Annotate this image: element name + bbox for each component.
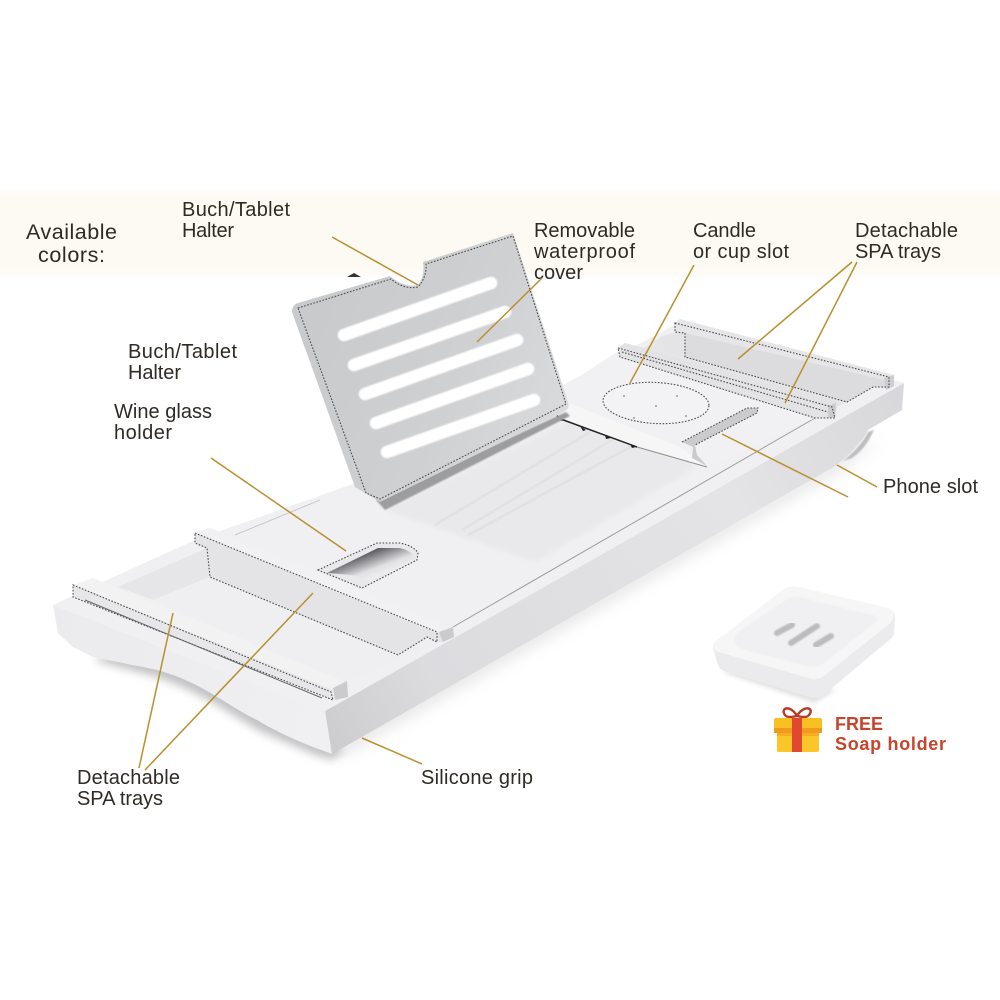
label: top spa trays: Detachable — [855, 220, 958, 242]
board stitching — [298, 236, 566, 499]
label: book holder top: Buch/Tablet — [182, 199, 290, 221]
label: removable cover: Removable — [534, 220, 635, 242]
soap dish top rim — [713, 586, 893, 679]
label: book holder top — [182, 199, 418, 285]
wine glass holder — [318, 543, 418, 588]
far spa tray — [618, 319, 894, 418]
label: removable cover: waterproof — [533, 241, 635, 263]
label: wine glass holder: Wine glass — [114, 401, 212, 423]
slatted centre mat — [385, 420, 700, 562]
label: bottom spa trays: SPA trays — [77, 788, 163, 810]
tray shadow under curved end — [93, 650, 345, 760]
label: phone slot: Phone slot — [883, 476, 978, 498]
icon: gift box — [774, 708, 822, 752]
label: candle slot: Candle — [693, 220, 756, 242]
label: candle slot — [630, 220, 789, 383]
tray long side shadow — [340, 440, 880, 758]
free soap holder label — [835, 714, 946, 754]
back seam of left platform — [235, 500, 320, 535]
label: wine glass holder — [114, 401, 346, 551]
bath tray product — [53, 233, 904, 760]
long edge seam — [453, 418, 815, 627]
right candle platform — [556, 350, 815, 467]
label: wine glass holder: holder — [114, 422, 172, 444]
label: book holder lower: Halter — [128, 362, 181, 384]
available colors label: colors: — [38, 243, 105, 267]
label: top spa trays — [738, 220, 958, 403]
label: silicone grip — [362, 738, 533, 789]
tray top surface — [53, 322, 904, 711]
phone slot — [682, 408, 758, 466]
label: phone slot — [722, 434, 978, 498]
label: removable cover: cover — [534, 262, 583, 284]
label: book holder lower — [128, 341, 237, 384]
label: top spa trays: SPA trays — [855, 241, 941, 263]
board slots — [344, 283, 534, 452]
free soap holder label: Soap holder — [835, 734, 946, 754]
soap dish body — [713, 586, 895, 698]
soap shadow — [722, 668, 835, 703]
header colour band — [0, 189, 1000, 277]
label: book holder top: Halter — [182, 220, 234, 242]
label: candle slot: or cup slot — [693, 241, 789, 263]
label: book holder lower: Buch/Tablet — [128, 341, 237, 363]
available colors label — [26, 220, 117, 267]
rubber foot — [843, 430, 874, 461]
soap dish slots — [777, 625, 831, 645]
soap holder — [713, 586, 895, 703]
label: silicone grip: Silicone grip — [421, 767, 533, 789]
label: bottom spa trays — [77, 593, 313, 810]
available colors label: Available — [26, 220, 117, 244]
board cast shadow — [376, 412, 570, 510]
candle slot — [602, 380, 710, 426]
soap dish recess — [734, 596, 877, 667]
near spa tray — [73, 528, 454, 700]
tray long side face — [325, 383, 904, 754]
free soap holder label: FREE — [835, 714, 883, 734]
label: bottom spa trays: Detachable — [77, 767, 180, 789]
small clip behind board — [347, 273, 361, 277]
tray left end face — [53, 605, 332, 754]
book and tablet holder board — [292, 233, 570, 510]
label: removable cover — [477, 220, 635, 342]
dark gap with teeth — [558, 418, 637, 447]
